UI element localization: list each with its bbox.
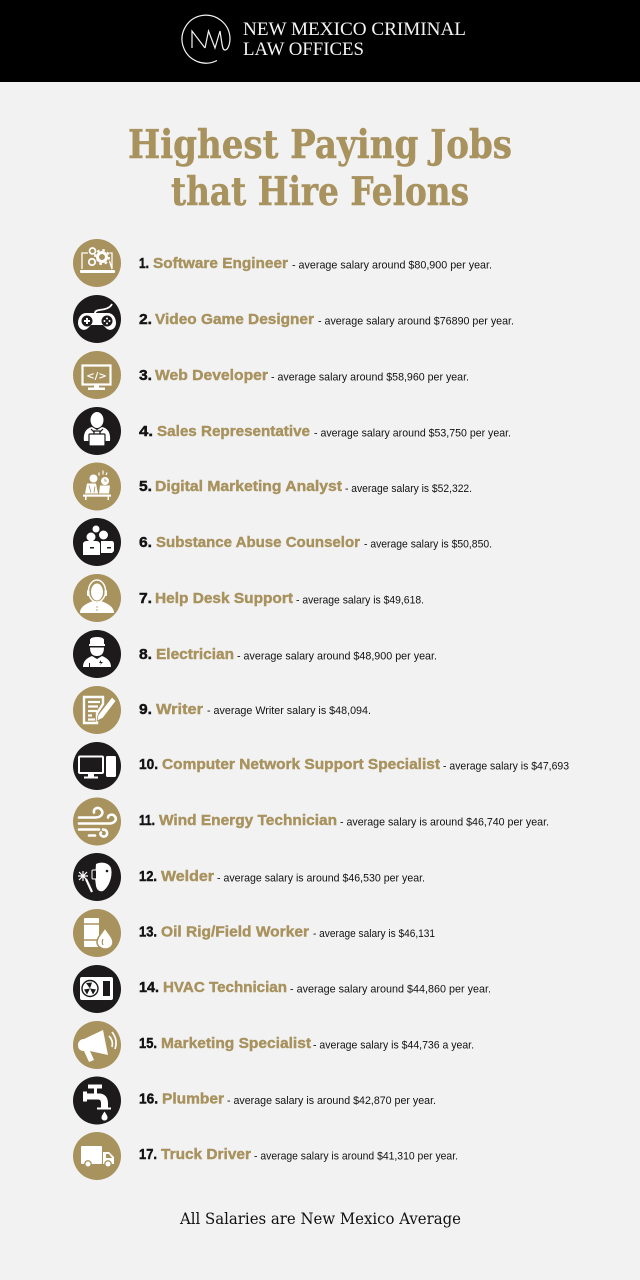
row 17: Truck Driver: Truck Driver — [161, 1147, 251, 1163]
row 17: Truck Driver — [73, 1132, 458, 1180]
row 10: Computer Network Support Specialist: 10. — [139, 757, 158, 773]
icon: laptop with gears — [73, 239, 121, 287]
row 3: Web Developer — [73, 351, 469, 399]
row 10: Computer Network Support Specialist: Computer Network Support Specialist — [162, 757, 440, 773]
row 14: HVAC Technician: HVAC Technician — [163, 980, 287, 996]
row 8: Electrician: Electrician — [156, 647, 234, 663]
row 4: Sales Representative: - average salary around $53,750 per year. — [314, 428, 511, 440]
row 5: Digital Marketing Analyst: 5. — [139, 479, 152, 495]
icon: desktop computer — [73, 742, 121, 790]
row 2: Video Game Designer: 2. — [139, 312, 152, 328]
row 9: Writer: - average Writer salary is $48,094. — [207, 705, 371, 717]
row 7: Help Desk Support — [73, 574, 424, 622]
row 8: Electrician: 8. — [139, 647, 152, 663]
icon: air conditioning unit — [73, 965, 121, 1013]
row 8: Electrician — [73, 630, 437, 678]
row 4: Sales Representative — [73, 407, 511, 455]
row 1: Software Engineer: 1. — [139, 256, 149, 272]
row 5: Digital Marketing Analyst: Digital Marketing Analyst — [155, 479, 342, 495]
row 16: Plumber — [73, 1076, 436, 1124]
row 12: Welder — [73, 853, 425, 901]
row 9: Writer: Writer — [156, 702, 203, 718]
row 1: Software Engineer: - average salary around $80,900 per year. — [292, 260, 492, 272]
icon: monitor with code: </> — [86, 371, 107, 382]
icon: game controller — [73, 295, 121, 343]
row 13: Oil Rig/Field Worker: - average salary is $46,131 — [313, 928, 435, 940]
row 3: Web Developer: 3. — [139, 368, 152, 384]
row 15: Marketing Specialist: Marketing Specialist — [161, 1036, 311, 1052]
footer note: All Salaries are New Mexico Average — [179, 1209, 461, 1228]
row 6: Substance Abuse Counselor — [73, 518, 492, 566]
icon: faucet and drop — [73, 1076, 121, 1124]
row 17: Truck Driver: 17. — [139, 1147, 157, 1163]
row 6: Substance Abuse Counselor: 6. — [139, 535, 152, 551]
row 11: Wind Energy Technician — [73, 798, 549, 846]
row 11: Wind Energy Technician: Wind Energy Technician — [159, 813, 337, 829]
firm name — [243, 20, 466, 60]
icon: megaphone — [73, 1021, 121, 1069]
icon: group of counselors — [73, 518, 121, 566]
row 7: Help Desk Support: - average salary is $49,618. — [296, 594, 424, 606]
row 15: Marketing Specialist: 15. — [139, 1036, 157, 1052]
row 16: Plumber: 16. — [139, 1092, 158, 1108]
row 1: Software Engineer: Software Engineer — [153, 256, 288, 272]
row 16: Plumber: - average salary is around $42,870 per year. — [227, 1095, 436, 1107]
row 3: Web Developer: Web Developer — [155, 368, 268, 384]
row 9: Writer: 9. — [139, 702, 152, 718]
row 12: Welder: Welder — [161, 869, 214, 885]
row 14: HVAC Technician — [73, 965, 491, 1013]
row 1: Software Engineer — [73, 239, 492, 287]
icon: paper and pencil — [73, 686, 121, 734]
firm name: NEW MEXICO CRIMINAL — [243, 20, 466, 40]
title: that Hire Felons — [171, 169, 469, 215]
row 3: Web Developer: - average salary around $58,960 per year. — [271, 372, 469, 384]
row 15: Marketing Specialist — [73, 1021, 474, 1069]
icon: welding mask and torch — [73, 853, 121, 901]
row 11: Wind Energy Technician: 11. — [139, 813, 155, 829]
row 4: Sales Representative: 4. — [139, 424, 153, 440]
icon: headset agent — [73, 574, 121, 622]
icon: analyst at desk — [73, 462, 121, 510]
row 12: Welder: 12. — [139, 869, 157, 885]
row 4: Sales Representative: Sales Representative — [157, 424, 310, 440]
row 15: Marketing Specialist: - average salary is $44,736 a year. — [313, 1040, 474, 1052]
row 13: Oil Rig/Field Worker: Oil Rig/Field Worker — [161, 924, 309, 940]
row 10: Computer Network Support Specialist: - average salary is $47,693 — [443, 760, 569, 772]
row 2: Video Game Designer: Video Game Designer — [155, 312, 314, 328]
row 9: Writer — [73, 686, 371, 734]
row 13: Oil Rig/Field Worker: 13. — [139, 924, 157, 940]
row 2: Video Game Designer: - average salary around $76890 per year. — [318, 316, 514, 328]
row 2: Video Game Designer — [73, 295, 514, 343]
title: Highest Paying Jobs — [128, 122, 512, 168]
icon: barrel and oil drop — [73, 909, 121, 957]
row 11: Wind Energy Technician: - average salary is around $46,740 per year. — [340, 816, 549, 828]
row 17: Truck Driver: - average salary is around $41,310 per year. — [254, 1150, 458, 1162]
row 12: Welder: - average salary is around $46,530 per year. — [217, 872, 425, 884]
row 5: Digital Marketing Analyst — [73, 462, 472, 510]
title — [128, 122, 512, 215]
row 7: Help Desk Support: Help Desk Support — [155, 591, 293, 607]
row 6: Substance Abuse Counselor: Substance Abuse Counselor — [156, 535, 360, 551]
row 5: Digital Marketing Analyst: - average salary is $52,322. — [345, 483, 472, 495]
row 8: Electrician: - average salary around $48,900 per year. — [237, 650, 437, 662]
icon: electrician with cap — [73, 630, 121, 678]
icon: delivery truck — [73, 1132, 121, 1180]
icon: wind — [73, 798, 121, 846]
icon: salesperson with case — [73, 407, 121, 455]
row 6: Substance Abuse Counselor: - average salary is $50,850. — [364, 538, 492, 550]
row 14: HVAC Technician: 14. — [139, 980, 159, 996]
row 16: Plumber: Plumber — [162, 1092, 224, 1108]
row 13: Oil Rig/Field Worker — [73, 909, 435, 957]
row 14: HVAC Technician: - average salary around $44,860 per year. — [290, 984, 491, 996]
firm name: LAW OFFICES — [243, 40, 364, 60]
header band — [0, 0, 640, 82]
row 7: Help Desk Support: 7. — [139, 591, 152, 607]
row 10: Computer Network Support Specialist — [73, 742, 569, 790]
icon: monitor with code — [73, 351, 121, 399]
logo: NM monogram — [182, 15, 230, 63]
